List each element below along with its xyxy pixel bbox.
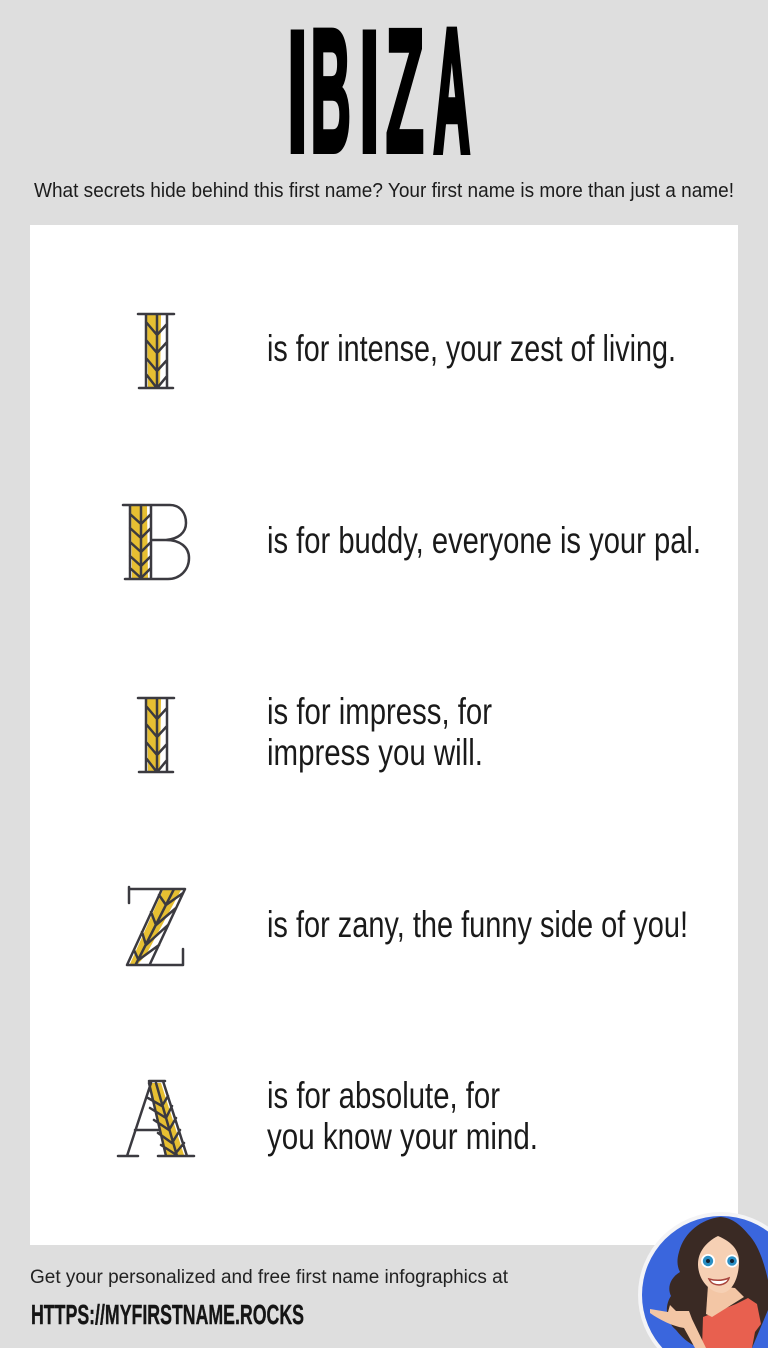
title (284, 0, 470, 193)
subtitle: What secrets hide behind this first name? Your first name is more than just a name! (34, 180, 734, 202)
text: I lines: impress you will. (267, 732, 483, 773)
text: A lines: you know your mind. (267, 1116, 538, 1157)
eyes (701, 1254, 715, 1268)
mouth (709, 1278, 729, 1285)
text: I lines: is for impress, for (267, 691, 492, 732)
hair (667, 1217, 768, 1348)
avatar (638, 1212, 768, 1348)
icon: letter Z (127, 887, 185, 965)
face (698, 1236, 739, 1293)
icon: letter I (138, 314, 174, 388)
arm and hand (650, 1305, 706, 1348)
text: A lines: is for absolute, for (267, 1075, 500, 1116)
shirt (702, 1298, 761, 1348)
footer text: Get your personalized and free first name infographics at (30, 1267, 509, 1288)
icon: letter A (118, 1081, 194, 1156)
icon: letter I second (138, 698, 174, 772)
panel: letters (30, 225, 738, 1245)
footer url: HTTPS://MYFIRSTNAME.ROCKS (31, 1299, 304, 1330)
text: A lines (267, 1075, 538, 1157)
neck (706, 1285, 744, 1317)
icon: letter B (123, 505, 189, 579)
text: I lines (267, 691, 492, 773)
